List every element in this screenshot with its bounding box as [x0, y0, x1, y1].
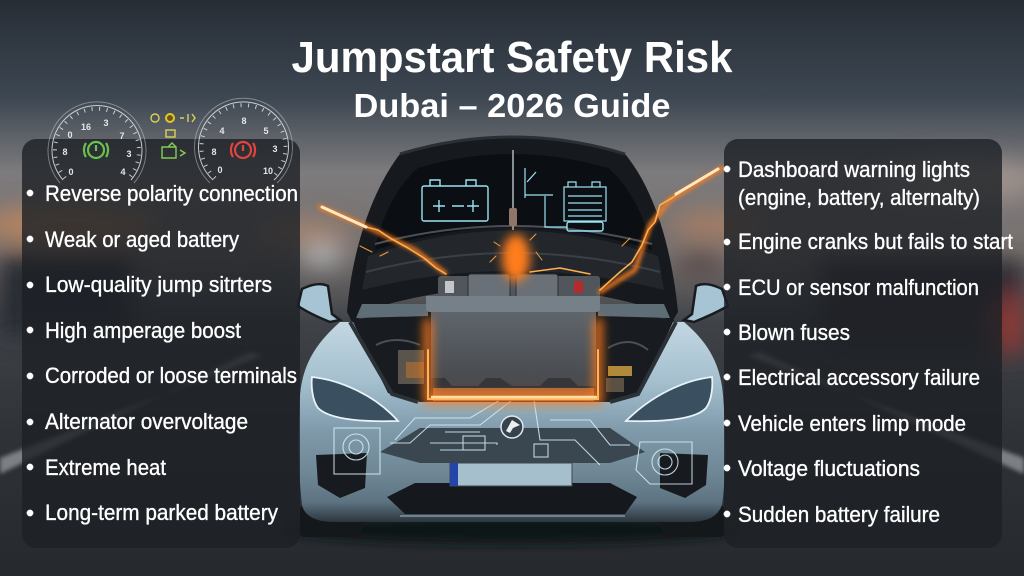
car: front body [298, 284, 728, 537]
hood hologram: battery schematic [422, 180, 488, 221]
center warning lights [151, 114, 195, 158]
lower grille [387, 483, 637, 514]
causes list: Extreme heat [45, 455, 166, 480]
symptoms list: Vehicle enters limp mode [738, 411, 966, 436]
right headlight [626, 377, 712, 421]
dashboard gauges: 3 [103, 118, 109, 128]
title: Jumpstart Safety Risk [292, 33, 733, 82]
dashboard gauges [48, 98, 292, 183]
car badge [501, 416, 523, 438]
green warning icon [84, 142, 108, 158]
dashboard gauges: 0 [67, 130, 73, 140]
dashboard gauges: 4 [120, 167, 126, 177]
left headlight [312, 377, 398, 421]
symptoms list: Sudden battery failure [738, 502, 940, 527]
car: open hood [347, 137, 678, 322]
symptoms list [724, 157, 1013, 527]
dashboard gauges: 5 [263, 126, 269, 136]
dashboard gauges: 4 [219, 126, 225, 136]
dashboard gauges: 7 [119, 131, 125, 141]
causes list: Reverse polarity connection [45, 181, 298, 206]
causes list: Alternator overvoltage [45, 409, 248, 434]
causes list: Corroded or loose terminals [45, 363, 297, 388]
dashboard gauges: 3 [126, 149, 132, 159]
engine bay [352, 308, 674, 402]
symptoms list: Engine cranks but fails to start [738, 229, 1013, 254]
hood hologram: circuit schematic [525, 168, 606, 231]
right mirror [684, 284, 728, 322]
left mirror [298, 284, 340, 322]
electric glow around battery [428, 322, 598, 400]
symptoms list: Voltage fluctuations [738, 456, 920, 481]
causes list [27, 181, 298, 525]
title [292, 33, 733, 124]
dashboard gauges: 16 [81, 122, 91, 132]
symptoms list: Electrical accessory failure [738, 365, 980, 390]
symptoms list: Dashboard warning lights [738, 157, 970, 182]
dashboard gauges: 8 [211, 147, 217, 157]
causes list: Weak or aged battery [45, 227, 239, 252]
panel: symptoms [724, 139, 1013, 548]
dashboard gauges: 8 [241, 116, 247, 126]
red warning icon [231, 142, 255, 158]
dashboard gauges: 0 [68, 167, 74, 177]
causes list: Long-term parked battery [45, 500, 278, 525]
symptoms list: Blown fuses [738, 320, 850, 345]
dashboard gauges: 10 [263, 166, 273, 176]
symptoms list: ECU or sensor malfunction [738, 275, 979, 300]
symptoms list: (engine, battery, alternalty) [738, 185, 980, 210]
dashboard gauges: 0 [217, 165, 223, 175]
causes list: High amperage boost [45, 318, 241, 343]
license plate [450, 463, 572, 486]
car battery [426, 274, 600, 401]
causes list: Low-quality jump sitrters [45, 272, 272, 297]
circuit overlay [334, 400, 692, 484]
dark mid grille band [380, 428, 645, 463]
panel: causes [22, 139, 300, 548]
subtitle: Dubai – 2026 Guide [354, 87, 670, 124]
lightning bolts [320, 168, 722, 292]
dashboard gauges: 8 [62, 147, 68, 157]
dashboard gauges: 3 [272, 144, 278, 154]
